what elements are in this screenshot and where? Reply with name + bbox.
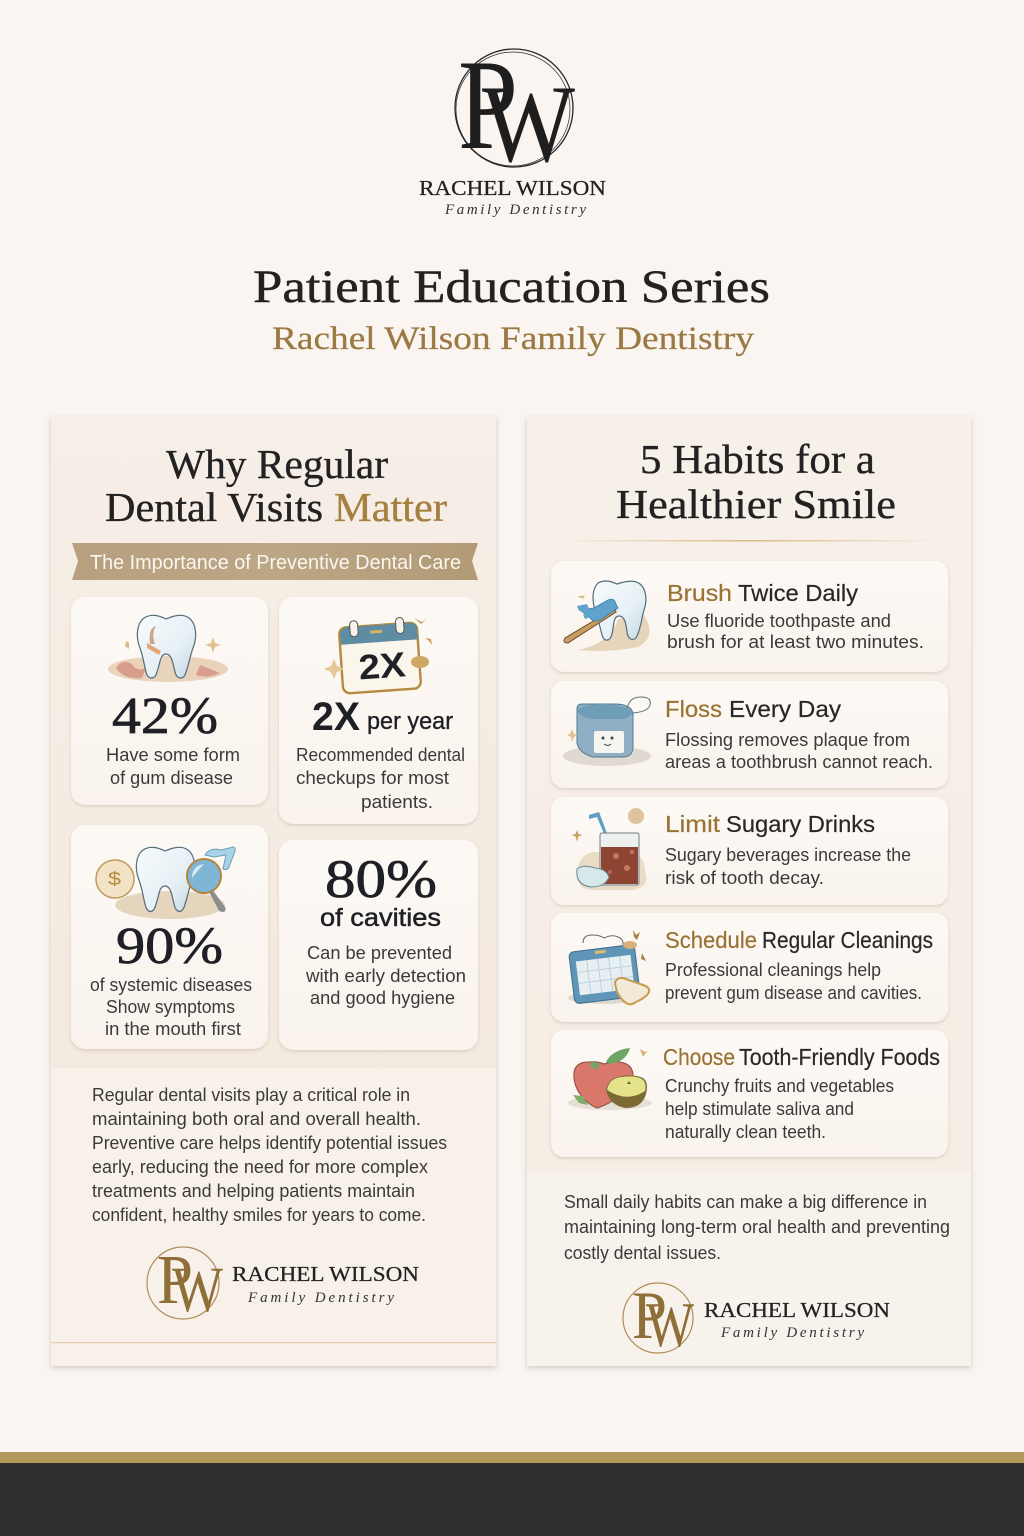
stat description: of systemic diseases <box>90 975 252 995</box>
body paragraph: Preventive care helps identify potential issues <box>92 1133 447 1153</box>
icon: tooth and toothbrush <box>564 581 650 651</box>
footer logo: W <box>172 1254 224 1326</box>
panel background <box>527 416 971 1366</box>
habit title <box>667 580 859 606</box>
stat description: Have some form <box>106 745 240 765</box>
habit title <box>665 811 875 837</box>
footer logo: P <box>632 1277 667 1353</box>
habit title: Floss <box>665 696 722 722</box>
habit card: choose tooth-friendly foods <box>551 1030 948 1157</box>
stat card: 90% <box>71 825 268 1049</box>
body paragraph <box>92 1085 447 1225</box>
body paragraph: costly dental issues. <box>564 1243 721 1263</box>
icon: tooth, coin and magnifier <box>96 847 235 919</box>
ribbon subtitle <box>72 543 478 580</box>
footer band <box>0 1452 1024 1536</box>
habit description: Sugary beverages increase the <box>665 845 911 865</box>
stat number: 90% <box>116 918 223 975</box>
panel heading: Why Regular <box>166 441 388 487</box>
habit title: Choose <box>663 1044 735 1070</box>
habit title <box>665 927 933 953</box>
footer logo <box>623 1277 890 1360</box>
stat description: patients. <box>361 792 433 812</box>
habit description: Use fluoride toothpaste and <box>667 611 891 631</box>
habit card: brush twice daily <box>551 561 948 672</box>
logo mark: P <box>458 33 518 176</box>
stat description: Show symptoms <box>106 997 235 1017</box>
logo mark <box>455 33 575 185</box>
ribbon subtitle: The Importance of Preventive Dental Care <box>90 552 461 574</box>
habit card: limit sugary drinks <box>551 797 948 905</box>
footer logo: P <box>157 1242 193 1319</box>
panel heading: Matter <box>334 484 447 530</box>
footer logo: Family Dentistry <box>247 1290 394 1306</box>
subtitle: Rachel Wilson Family Dentistry <box>272 321 755 357</box>
footer logo: Family Dentistry <box>720 1325 864 1341</box>
stat description: of gum disease <box>110 768 233 788</box>
habit title: Sugary Drinks <box>726 811 875 837</box>
icon: tooth, coin and magnifier: $ <box>108 869 121 889</box>
stat description <box>296 745 465 812</box>
logo tagline: Family Dentistry <box>444 202 586 218</box>
panel: 5 habits for a healthier smile <box>527 416 971 1366</box>
stat description: in the mouth first <box>105 1019 241 1039</box>
habit card: schedule regular cleanings <box>551 913 948 1022</box>
habit description: Flossing removes plaque from <box>665 730 910 750</box>
habit title: Limit <box>665 811 721 837</box>
habit description: help stimulate saliva and <box>665 1099 854 1119</box>
stat number: 42% <box>112 688 218 745</box>
panel heading: Dental Visits <box>105 484 323 530</box>
body paragraph: confident, healthy smiles for years to come. <box>92 1205 426 1225</box>
stat description <box>106 745 240 788</box>
habit description <box>667 611 924 652</box>
icon: floss box <box>563 697 651 766</box>
body paragraph <box>564 1192 950 1263</box>
body paragraph: treatments and helping patients maintain <box>92 1181 415 1201</box>
panel background <box>51 416 496 1366</box>
habit description: naturally clean teeth. <box>665 1122 826 1142</box>
footer logo: W <box>646 1290 694 1360</box>
habit card: floss every day <box>551 681 948 788</box>
habit title: Schedule <box>665 927 757 953</box>
habit title <box>663 1044 940 1070</box>
stat subheading: of cavities <box>320 904 441 932</box>
stat card: 2x per year <box>279 597 478 824</box>
habit title: Every Day <box>729 696 842 722</box>
panel heading <box>616 436 896 527</box>
habit description: areas a toothbrush cannot reach. <box>665 752 933 772</box>
footer logo <box>147 1242 419 1326</box>
icon: tooth with gum disease <box>108 615 228 682</box>
panel heading: Healthier Smile <box>616 481 896 527</box>
stat description: Recommended dental <box>296 745 465 765</box>
body paragraph: Small daily habits can make a big difference in <box>564 1192 927 1212</box>
habit title: Twice Daily <box>738 580 859 606</box>
stat description <box>305 943 466 1008</box>
top logo <box>419 33 606 218</box>
stat description <box>90 975 252 1039</box>
body paragraph: maintaining long-term oral health and preventing <box>564 1217 950 1237</box>
habit description: prevent gum disease and cavities. <box>665 983 922 1003</box>
stat number: 2X <box>312 695 360 739</box>
stat card: 80% <box>279 840 478 1050</box>
habit description <box>665 845 911 888</box>
stat description: and good hygiene <box>310 988 455 1008</box>
footer logo: RACHEL WILSON <box>232 1262 419 1286</box>
habit title: Tooth-Friendly Foods <box>739 1044 940 1070</box>
stat description: Can be prevented <box>307 943 452 963</box>
habit description: risk of tooth decay. <box>665 868 824 888</box>
habit description: brush for at least two minutes. <box>667 632 924 652</box>
habit description: Professional cleanings help <box>665 960 881 980</box>
icon: calendar 2x: 2X <box>357 645 408 687</box>
habit description <box>665 730 933 772</box>
habit description <box>665 1076 894 1142</box>
stat description: with early detection <box>305 966 466 986</box>
stat number: per year <box>367 708 453 735</box>
habit title: Brush <box>667 580 732 606</box>
stat card: 42% <box>71 597 268 805</box>
panel heading <box>105 441 447 530</box>
stat number: 80% <box>325 849 437 909</box>
stat description: checkups for most <box>296 768 449 788</box>
habit description <box>665 960 922 1003</box>
body paragraph: maintaining both oral and overall health. <box>92 1109 421 1129</box>
icon: calendar 2x <box>324 616 432 694</box>
panel heading: 5 Habits for a <box>640 436 875 482</box>
icon: calendar and tooth <box>568 930 649 1004</box>
icon: apples <box>568 1048 652 1110</box>
habit title <box>665 696 842 722</box>
footer logo: RACHEL WILSON <box>704 1298 890 1322</box>
icon: soda glass <box>572 808 646 890</box>
body paragraph: early, reducing the need for more complex <box>92 1157 428 1177</box>
logo mark: W <box>482 63 575 185</box>
stat number <box>312 695 453 739</box>
panel: why regular dental visits matter <box>51 416 496 1366</box>
body paragraph: Regular dental visits play a critical role in <box>92 1085 410 1105</box>
title: Patient Education Series <box>253 261 770 313</box>
logo name: RACHEL WILSON <box>419 176 606 200</box>
habit description: Crunchy fruits and vegetables <box>665 1076 894 1096</box>
habit title: Regular Cleanings <box>762 927 933 953</box>
